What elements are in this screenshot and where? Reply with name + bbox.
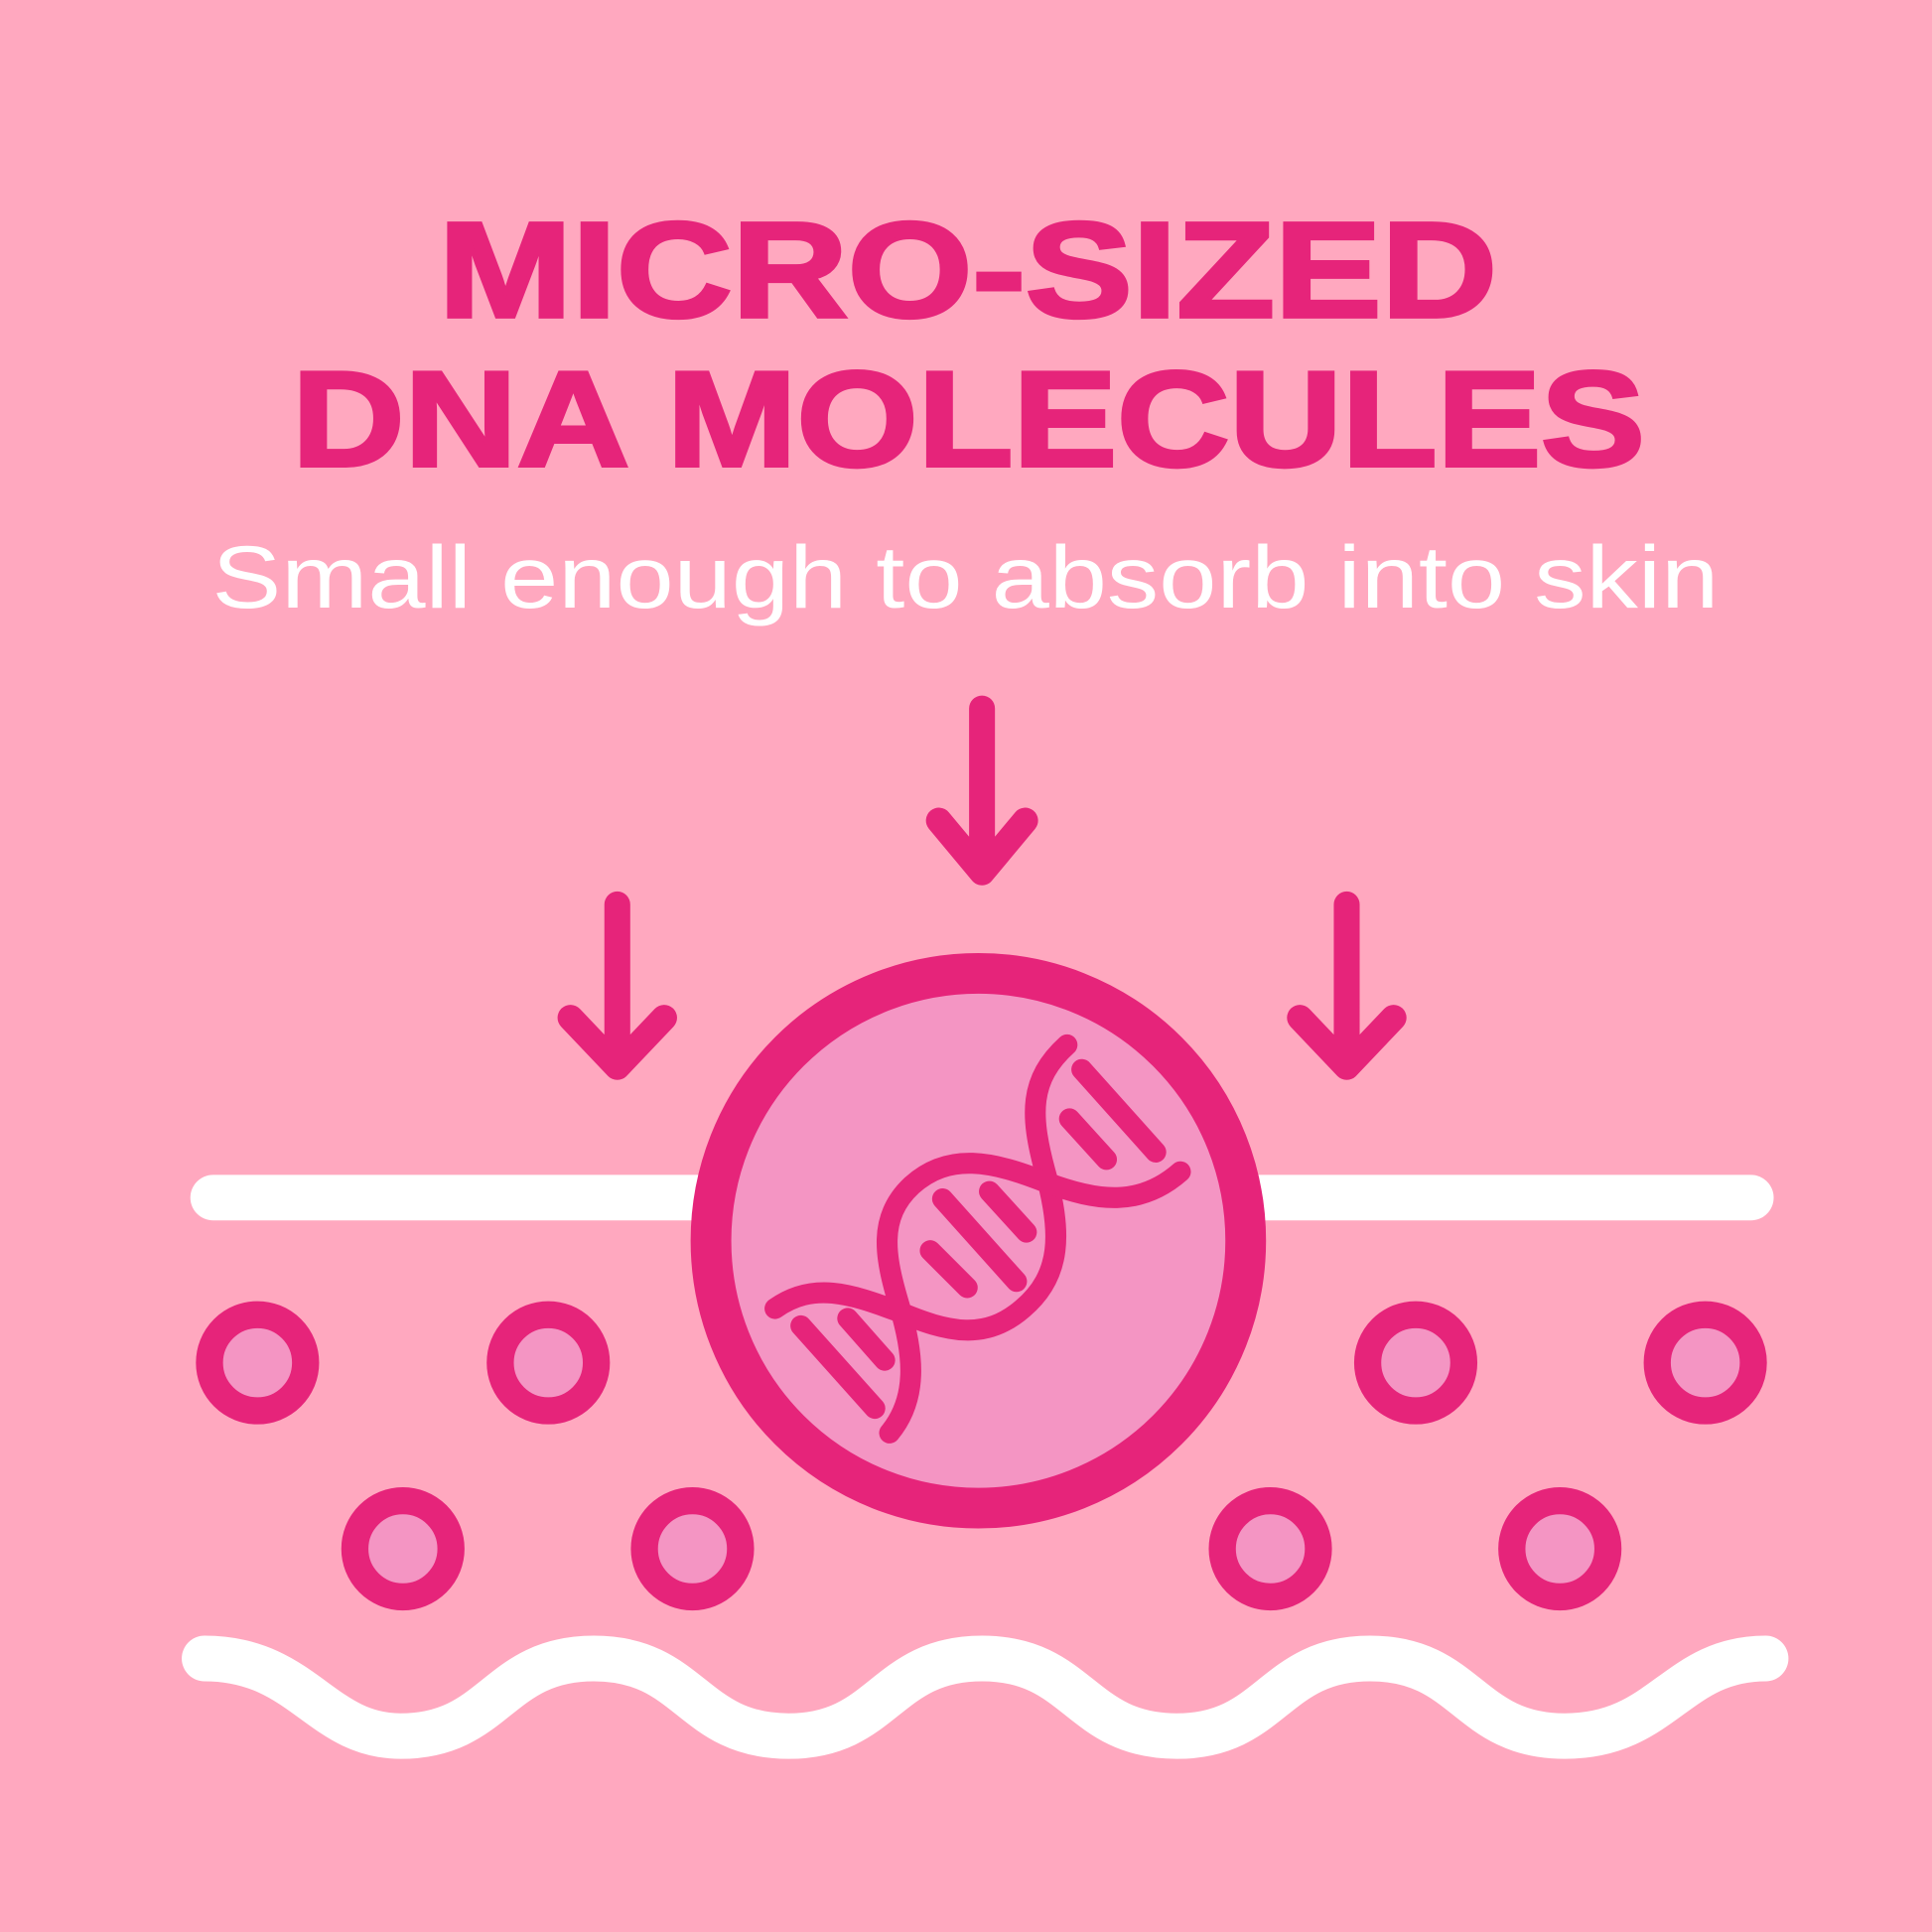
wavy skin layer line: [205, 1658, 1765, 1736]
DNA molecule circle: [711, 973, 1246, 1508]
title: MICRO-SIZED: [439, 194, 1497, 345]
skin cells: [209, 1314, 1753, 1596]
arrow: right: [1300, 904, 1394, 1067]
subtitle: Small enough to absorb into skin: [211, 527, 1719, 626]
icon: DNA helix: [775, 1044, 1180, 1433]
title: DNA MOLECULES: [292, 343, 1645, 494]
skin surface line: [213, 1179, 1751, 1216]
title: [292, 194, 1645, 494]
arrow: center: [939, 709, 1026, 873]
arrow: left: [571, 904, 664, 1067]
